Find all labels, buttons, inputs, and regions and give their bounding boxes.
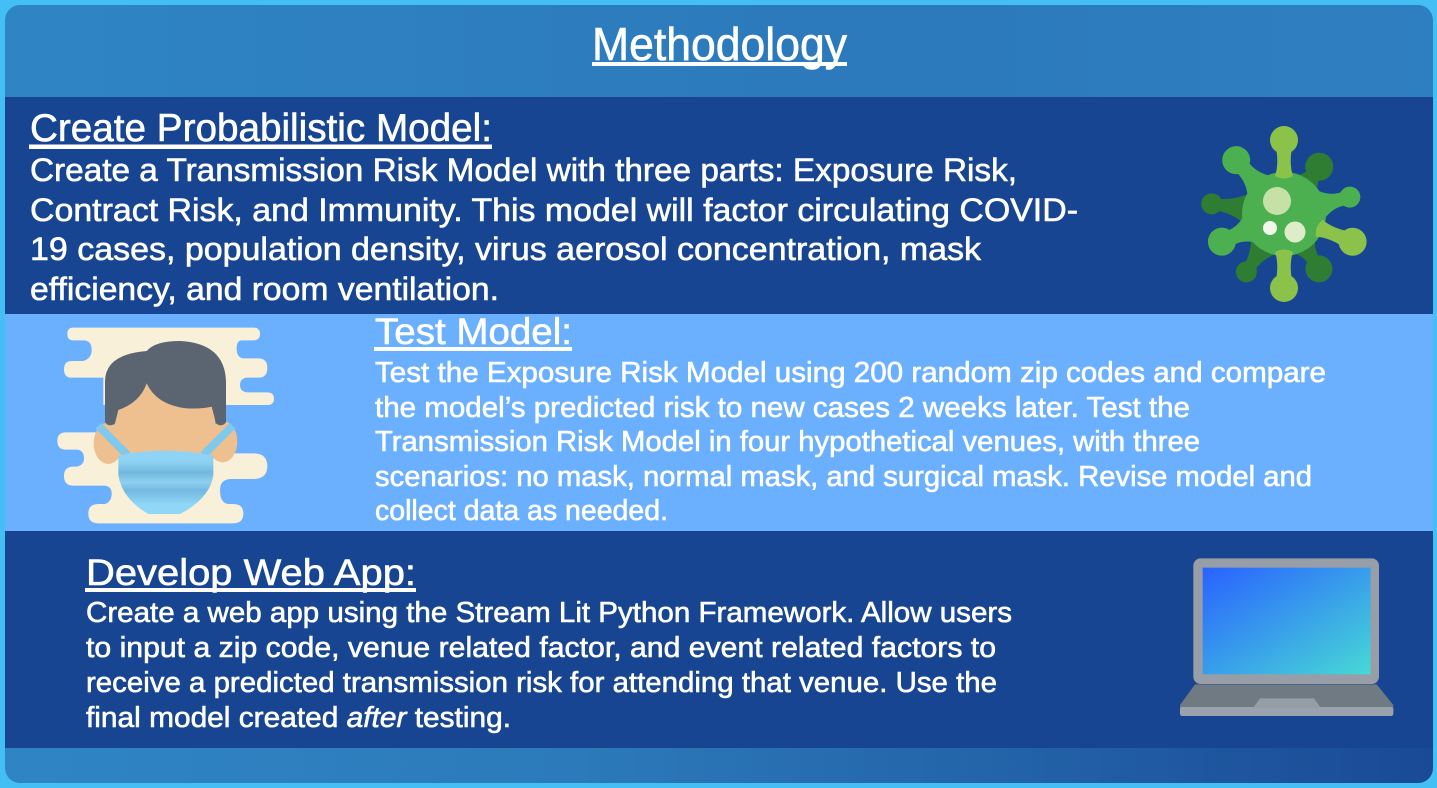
text block: develop web app: to input a zip code, venue related factor, and event related factors to xyxy=(86,632,996,664)
text block: create probabilistic model: Contract Risk, and Immunity. This model will factor circulating COVID- xyxy=(30,192,1078,228)
panel: create probabilistic model xyxy=(5,97,1433,314)
text block: develop web app xyxy=(86,597,1012,734)
icon: person wearing mask xyxy=(57,328,274,523)
text block: test model: collect data as needed. xyxy=(375,495,668,527)
text block: develop web app: Create a web app using the Stream Lit Python Framework. Allow users xyxy=(86,597,1012,629)
panel: test model xyxy=(5,311,1433,531)
heading: create probabilistic model: Create Probabilistic Model: xyxy=(30,107,492,150)
heading: develop web app: Develop Web App: xyxy=(86,552,416,593)
title: Methodology xyxy=(592,18,847,70)
text block: test model: the model’s predicted risk to new cases 2 weeks later. Test the xyxy=(375,392,1190,424)
text block: test model xyxy=(375,357,1326,527)
text block: develop web app: receive a predicted transmission risk for attending that venue. Use the xyxy=(86,667,997,699)
bottom band xyxy=(5,700,1433,783)
icon: laptop xyxy=(1180,558,1393,716)
text block: create probabilistic model: Create a Transmission Risk Model with three parts: Exposure Risk, xyxy=(30,152,1017,188)
text block: create probabilistic model: 19 cases, population density, virus aerosol concentration, mask xyxy=(30,231,982,267)
text block: create probabilistic model xyxy=(30,152,1078,307)
text block: develop web app: final model created after testing. xyxy=(86,702,511,734)
text block: test model: scenarios: no mask, normal mask, and surgical mask. Revise model and xyxy=(375,461,1312,493)
heading: test model: Test Model: xyxy=(375,311,572,352)
top band xyxy=(5,5,1433,125)
text block: create probabilistic model: efficiency, and room ventilation. xyxy=(30,271,499,307)
icon: virus xyxy=(1199,126,1371,302)
text block: test model: Test the Exposure Risk Model using 200 random zip codes and compare xyxy=(375,357,1326,389)
panel: develop web app xyxy=(5,531,1433,748)
text block: test model: Transmission Risk Model in four hypothetical venues, with three xyxy=(375,426,1200,458)
